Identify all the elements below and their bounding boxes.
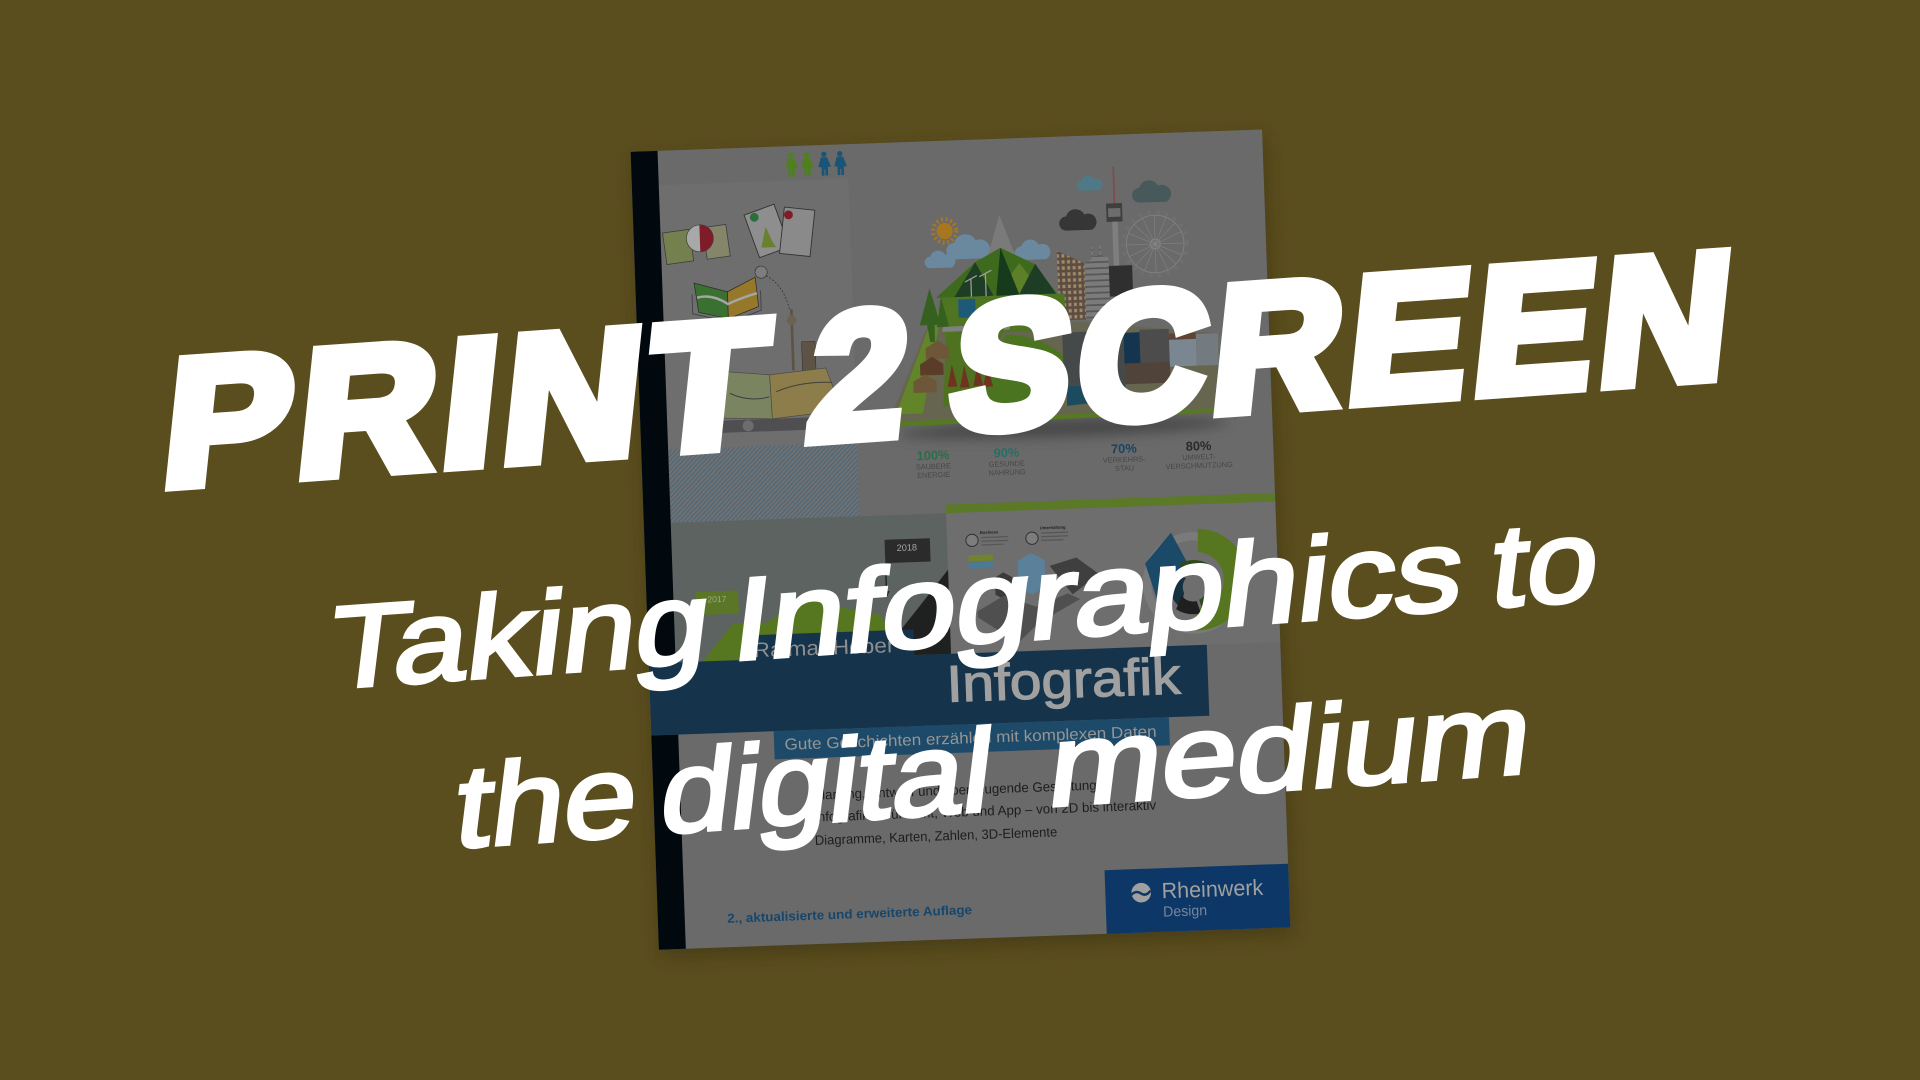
terrain base bbox=[885, 300, 1230, 426]
label: 2018 with pole bbox=[882, 538, 932, 597]
statistic: 70% traffic jam bbox=[1102, 440, 1147, 473]
book cover bbox=[631, 129, 1293, 957]
publisher box bbox=[1105, 864, 1290, 934]
title word: PRINT: PRINT bbox=[155, 281, 783, 525]
buildings bbox=[1057, 244, 1134, 320]
subtitle word: Infographics: Infographics bbox=[726, 503, 1471, 685]
publisher imprint: Design bbox=[1163, 903, 1207, 921]
statistic: 90% healthy food: 90% bbox=[993, 445, 1020, 461]
red trees bbox=[947, 363, 993, 388]
green timeline mountain bbox=[700, 593, 906, 663]
label: business: Business bbox=[980, 529, 999, 535]
blue panel bbox=[958, 299, 976, 318]
panel: sketches bbox=[659, 178, 858, 449]
charcoal timeline mountain bbox=[897, 568, 955, 656]
label: 2018 with pole: 2018 bbox=[896, 542, 917, 553]
sketch: green and yellow folded book bbox=[691, 265, 790, 324]
feature list: Planung, Entwurf und überzeugende Gestaltung bbox=[813, 778, 1097, 803]
icon: publisher logo bbox=[1131, 883, 1151, 903]
feature list: Infografiken für Print, Web und App – von 2D bis interaktiv bbox=[814, 798, 1157, 825]
label: entertainment: Unterhaltung bbox=[1040, 524, 1066, 530]
evergreen trees left bbox=[918, 288, 950, 343]
statistic: 70% traffic jam: 70% bbox=[1111, 440, 1138, 456]
author name: Raimar Heber bbox=[753, 634, 895, 662]
sketch: split circle on maps bbox=[662, 224, 730, 265]
edition note: 2., aktualisierte und erweiterte Auflage bbox=[727, 902, 972, 926]
road bbox=[942, 323, 1011, 332]
icon: slate cloud bbox=[1132, 180, 1171, 203]
publisher name: Rheinwerk bbox=[1161, 875, 1265, 903]
subtitle band: Gute Geschichten erzählen mit komplexen Daten bbox=[784, 724, 1157, 754]
mountains bbox=[933, 213, 1058, 302]
feature list: Diagramme, Karten, Zahlen, 3D-Elemente bbox=[815, 824, 1057, 848]
subtitle word: to: to bbox=[1485, 494, 1607, 632]
statistic: 100% clean energy: SAUBERE bbox=[916, 461, 951, 471]
statistic: 100% clean energy: 100% bbox=[916, 447, 950, 463]
icon: teal cloud bbox=[1076, 175, 1103, 191]
label: 2017: 2017 bbox=[707, 594, 727, 604]
subtitle word: Taking: Taking bbox=[322, 556, 718, 714]
book title: Infografik bbox=[946, 647, 1182, 713]
statistic: 100% clean energy bbox=[915, 447, 951, 480]
sketch: open book with tower bbox=[717, 307, 843, 433]
city blocks bbox=[1062, 327, 1228, 412]
statistic: 90% healthy food: NAHRUNG bbox=[988, 467, 1026, 477]
subtitle bbox=[322, 494, 1607, 873]
main title bbox=[155, 214, 1748, 525]
icon: light blue clouds bbox=[924, 231, 1051, 268]
icon: charcoal cloud bbox=[1059, 208, 1097, 231]
icon: ferris wheel bbox=[1122, 211, 1188, 277]
statistic: 80% pollution: VERSCHMUTZUNG bbox=[1165, 460, 1233, 471]
scene shadow bbox=[898, 414, 1229, 443]
statistic: 90% healthy food bbox=[988, 444, 1026, 477]
book spine bbox=[631, 151, 686, 950]
book shadow bbox=[633, 137, 1293, 957]
illustration: mountain and city scene bbox=[880, 163, 1231, 443]
statistic: 90% healthy food: GESUNDE bbox=[989, 459, 1025, 469]
label: 2017 bbox=[696, 590, 739, 615]
green hillside bbox=[892, 310, 945, 414]
houses bbox=[912, 340, 950, 393]
green bar bbox=[946, 493, 1275, 513]
statistic: 70% traffic jam: STAU bbox=[1115, 463, 1134, 473]
green base strip bbox=[890, 408, 1227, 427]
icon: sun bbox=[933, 219, 957, 243]
panel: hatched strip bbox=[668, 443, 859, 523]
icon: four people bbox=[785, 151, 847, 177]
subtitle word: medium: medium bbox=[1042, 667, 1540, 831]
title word: SCREEN: SCREEN bbox=[942, 214, 1748, 470]
feature list bbox=[813, 776, 1157, 848]
statistic: 80% pollution: UMWELT- bbox=[1182, 452, 1216, 462]
panel: timeline bbox=[671, 513, 955, 665]
green striped field bbox=[968, 333, 1066, 407]
statistic: 80% pollution: 80% bbox=[1185, 438, 1212, 454]
statistic: 100% clean energy: ENERGIE bbox=[917, 470, 950, 480]
title number: 2: 2 bbox=[800, 271, 924, 480]
cover page bbox=[631, 129, 1290, 950]
icon: entertainment badge bbox=[1026, 532, 1038, 545]
field bbox=[941, 329, 1007, 407]
subtitle band bbox=[774, 717, 1170, 759]
icon: business badge bbox=[966, 534, 978, 547]
mini bars bbox=[968, 554, 993, 569]
subtitle word: digital: digital bbox=[654, 704, 1000, 859]
statistic: 70% traffic jam: VERKEHRS- bbox=[1103, 454, 1146, 465]
sketch: two map cards bbox=[744, 203, 816, 259]
statistic: 80% pollution bbox=[1165, 437, 1233, 471]
donut chart bbox=[1144, 527, 1250, 632]
blue title band bbox=[648, 619, 1209, 736]
subtitle word: the: the bbox=[449, 729, 646, 873]
icon: tv tower bbox=[1105, 166, 1124, 268]
mid meadow bbox=[942, 293, 1066, 334]
panel: isometric infographic bbox=[946, 493, 1280, 654]
wind turbines bbox=[964, 270, 993, 305]
caption lines bbox=[981, 532, 1068, 545]
isometric buildings bbox=[976, 551, 1101, 644]
